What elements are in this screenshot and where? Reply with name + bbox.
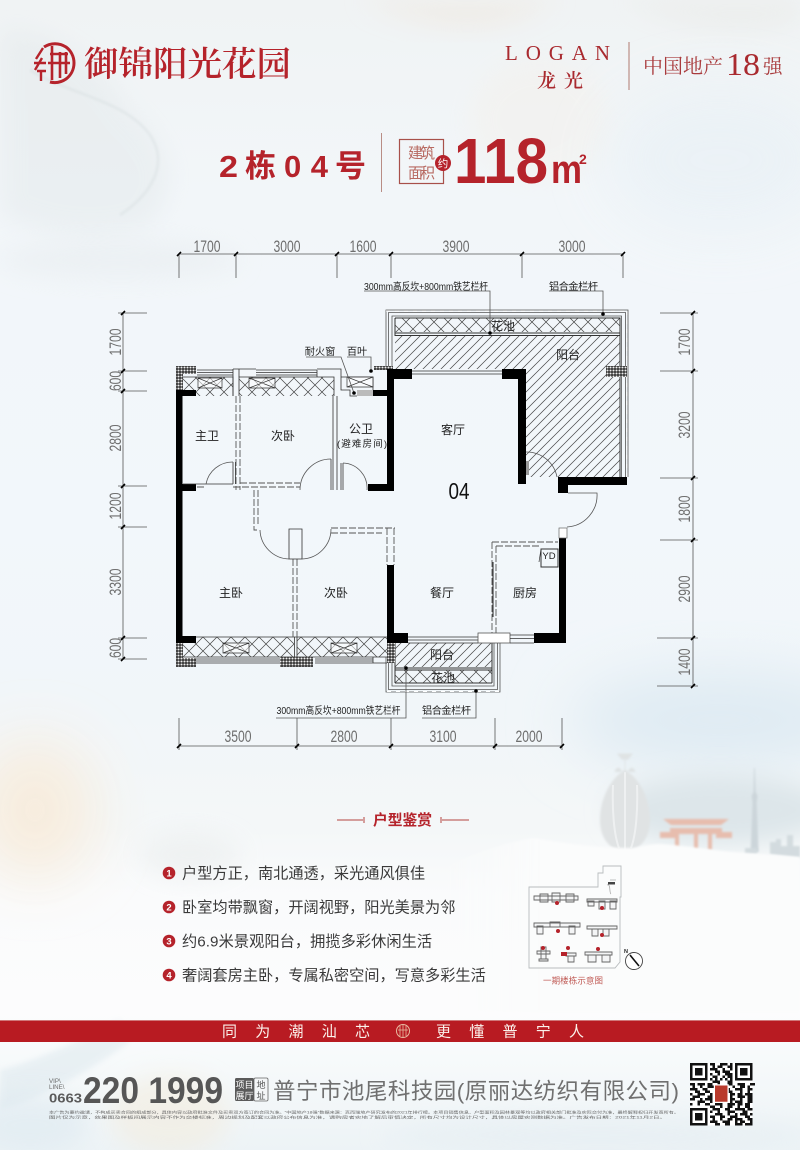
illustration: landmark skyline on snow hill <box>440 754 800 1012</box>
dimensions: bottom <box>177 718 564 750</box>
slogan: 中国地产18强 <box>628 42 783 90</box>
developer brand: LOGAN 龙光 <box>505 41 610 93</box>
room labels: 04 <box>448 478 470 504</box>
legal fine print: 图片仅为示意，效果图及样板间展示内容不作为交楼标准，周边规划及配套以政府公布信息为准，请购房者实地了解后审慎决定，所有尺寸均为设计尺寸，具体以房屋实测数据为准。广告发布日期：2021年11月2日。 <box>49 1114 666 1120</box>
compass: N <box>624 949 628 955</box>
room labels: 餐厅 <box>430 585 454 600</box>
room labels: 主卧 <box>219 586 243 600</box>
room labels: 公卫 <box>349 422 373 436</box>
area block: 118 square metres: 118 <box>454 125 548 197</box>
feature 4: 4 <box>166 970 172 982</box>
building markers <box>541 901 604 956</box>
feature 4: 奢阔套房主卧，专属私密空间，写意多彩生活 <box>182 966 486 984</box>
room labels: 花池 <box>491 318 515 333</box>
feature 2: 2 <box>166 902 172 914</box>
phone number: 0663 <box>49 1090 82 1106</box>
feature 1: 户型方正，南北通透，采光通风俱佳 <box>182 866 425 882</box>
room labels: 客厅 <box>441 422 465 437</box>
area block: 118 square metres: 建筑 <box>408 145 435 162</box>
address: 地 <box>256 1079 266 1090</box>
callouts and leader lines: 铝合金栏杆 <box>422 704 471 717</box>
dimensions: left: 3300 <box>106 568 125 596</box>
site plan <box>529 866 642 986</box>
dimensions: left: 1700 <box>106 328 125 356</box>
callouts and leader lines: 300mm高反坎+800mm铁艺栏杆 <box>276 704 400 717</box>
dimensions: right: 3200 <box>675 412 694 438</box>
heading: unit name: 号 <box>335 149 366 184</box>
callouts and leader lines: 铝合金栏杆 <box>549 280 598 293</box>
project name: 御锦阳光花园 <box>84 36 291 86</box>
structural walls <box>176 369 627 643</box>
dimensions: left: 600 <box>106 638 125 658</box>
slogan: 中国地产18强: 18 <box>726 46 760 82</box>
room labels: (避难房间) <box>337 438 387 450</box>
building blocks <box>534 893 617 962</box>
area block: 118 square metres: m <box>551 148 582 192</box>
large L-shaped balcony <box>374 310 628 477</box>
feature 3: 3 <box>166 936 172 948</box>
section heading: 户型鉴赏 <box>337 811 469 829</box>
feature 3: 约6.9米景观阳台，拥揽多彩休闲生活 <box>182 934 432 950</box>
dimensions: bottom: 2800 <box>330 727 358 746</box>
room labels: 次卧 <box>324 586 348 600</box>
heading: unit name: 栋 <box>245 149 276 184</box>
slogan banner: 更懂普宁人 <box>436 1024 584 1040</box>
dimensions: top: 1600 <box>350 237 376 256</box>
section heading: 户型鉴赏: 户型鉴赏 <box>373 811 432 829</box>
legal fine print <box>49 1110 679 1120</box>
small south balcony <box>386 643 500 692</box>
slogan banner <box>0 1020 800 1042</box>
south bay windows <box>176 637 395 667</box>
dimensions: bottom: 3500 <box>224 727 252 746</box>
legal fine print: 本广告为要约邀请，不构成买卖合同的组成部分，具体内容以政府批准文件及买卖双方签订的合同为准。“中国地产18强”数据来源：克而瑞地产研究发布的2021年排行榜。本项目销售信息、户型面积及园林景观等均以政府相关部门批准及实际交付为准，最终解释权归开发商所有。 <box>49 1110 679 1114</box>
area block: 118 square metres: 2 <box>579 151 587 167</box>
dimensions: bottom: 3100 <box>430 727 456 746</box>
address: 普宁市池尾科技园(原丽达纺织有限公司) <box>273 1079 679 1104</box>
developer brand: LOGAN 龙光: 龙光 <box>537 66 583 93</box>
site plan caption: 一期楼栋示意图 <box>543 976 603 986</box>
dimensions: right: 1800 <box>675 496 694 522</box>
room labels <box>195 318 580 685</box>
room labels: 阳台 <box>556 347 580 362</box>
address: 址 <box>256 1090 266 1101</box>
room labels: 阳台 <box>430 647 454 662</box>
dimensions: top: 3000 <box>274 237 300 256</box>
heading: unit name: 2 <box>219 149 238 184</box>
callouts and leader lines <box>276 280 605 718</box>
floor plan: unit 04 <box>176 280 628 718</box>
dimensions: top: 1700 <box>194 237 220 256</box>
dimensions: right: 1700 <box>675 328 694 356</box>
area block: 118 square metres: 约 <box>438 157 448 170</box>
north bay windows and shafts <box>176 366 373 396</box>
dimensions: left: 1200 <box>106 492 125 520</box>
feature 1: 1 <box>166 868 172 880</box>
dimensions: left <box>106 311 147 661</box>
callouts and leader lines: 百叶 <box>347 346 367 358</box>
phone number: VIP\ <box>49 1078 61 1085</box>
area block: 118 square metres <box>381 125 587 197</box>
logo: 御锦阳光花园 <box>34 36 291 86</box>
callouts and leader lines: 耐火窗 <box>305 345 335 358</box>
area block: 118 square metres: 面积 <box>408 165 435 182</box>
feature 2: 卧室均带飘窗，开阔视野，阳光美景为邻 <box>182 898 455 916</box>
room labels: 次卧 <box>271 429 295 443</box>
developer brand: LOGAN 龙光: LOGAN <box>505 41 610 65</box>
dimensions: top: 3900 <box>442 237 470 256</box>
callouts and leader lines: 300mm高反坎+800mm铁艺栏杆 <box>364 280 488 293</box>
dimensions: left: 2800 <box>106 424 125 452</box>
logo mark <box>34 44 74 83</box>
partitions, doors and kitchen: YD <box>542 551 556 562</box>
slogan banner: 同为潮汕芯 <box>222 1024 370 1040</box>
slogan: 中国地产18强: 强 <box>763 51 783 79</box>
dimensions: left: 600 <box>106 371 125 391</box>
room labels: 厨房 <box>513 585 537 600</box>
address: 项目 <box>235 1080 254 1090</box>
slogan: 中国地产18强: 中国地产 <box>643 50 723 79</box>
dimensions: right: 2900 <box>675 576 694 602</box>
partitions, doors and kitchen <box>183 371 597 643</box>
dimensions: top <box>177 237 625 278</box>
dimensions: right <box>657 311 698 688</box>
phone number: 220 1999 <box>83 1070 223 1111</box>
heading: unit name: 04 <box>284 149 329 184</box>
dimensions: bottom: 2000 <box>516 727 542 746</box>
room labels: 主卫 <box>195 429 219 443</box>
dimensions: right: 1400 <box>675 648 694 676</box>
feature list <box>163 866 486 984</box>
room labels: 花池 <box>431 670 455 685</box>
dimensions: top: 3000 <box>558 237 586 256</box>
QR code <box>690 1063 755 1126</box>
phone number: LINE\ <box>49 1084 65 1091</box>
address: 展厅 <box>235 1091 254 1101</box>
heading: unit name <box>219 149 366 184</box>
